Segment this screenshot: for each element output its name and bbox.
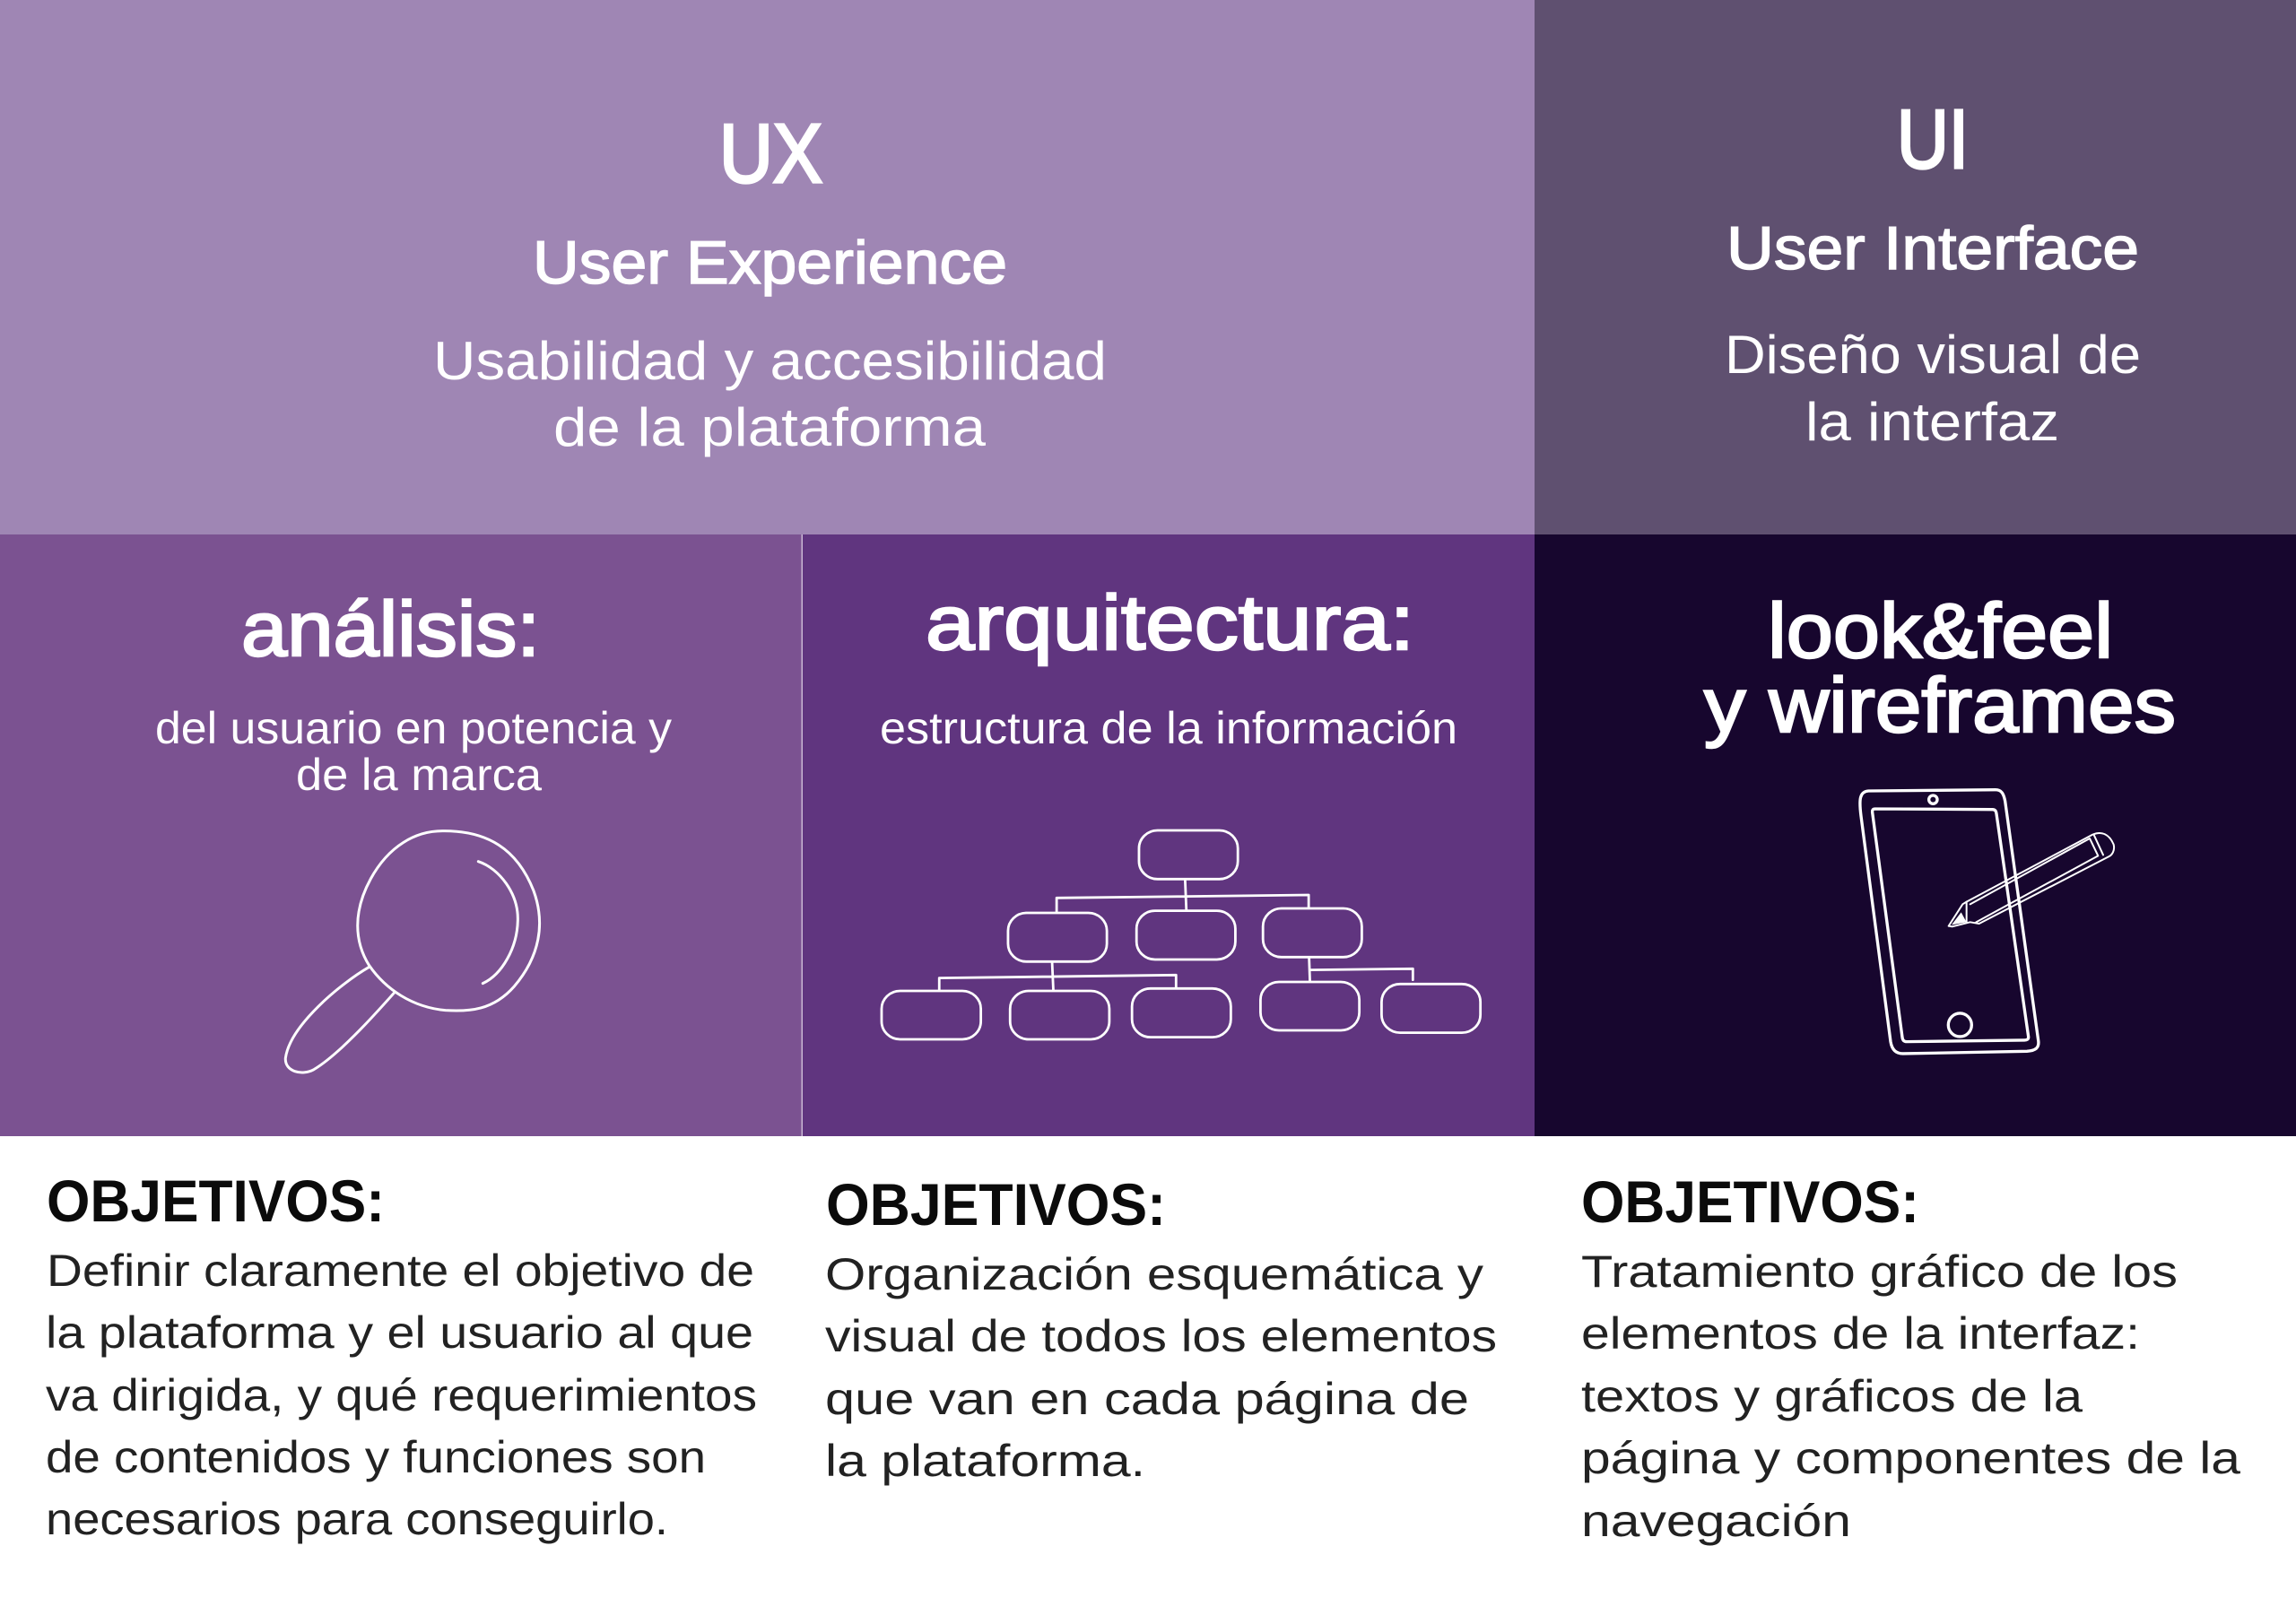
heading: OBJETIVOS:	[826, 1171, 1166, 1238]
heading: OBJETIVOS:	[1581, 1168, 1919, 1235]
UI description: Diseño visual de	[1725, 325, 2141, 385]
body text: Definir claramente el objetivo de	[47, 1246, 754, 1296]
body text: página y componentes de la	[1581, 1433, 2240, 1483]
UI subtitle: User Interface	[1726, 214, 2139, 282]
análisis heading: análisis:	[241, 586, 540, 673]
body text: visual de todos los elementos	[825, 1311, 1497, 1361]
icon: tablet and pencil	[1860, 790, 2114, 1054]
icon: magnifying glass	[285, 831, 540, 1073]
body text: la plataforma.	[825, 1436, 1145, 1486]
body text: elementos de la interfaz:	[1581, 1308, 2140, 1359]
vertical divider	[802, 534, 803, 1136]
column: análisis objectives	[46, 1168, 757, 1544]
body text: navegación	[1581, 1496, 1851, 1546]
body text: va dirigida, y qué requerimientos	[46, 1370, 757, 1420]
UX subtitle: User Experience	[533, 229, 1007, 297]
body text: que van en cada página de	[825, 1374, 1469, 1424]
look&feel heading	[1704, 588, 2176, 749]
body text	[825, 1249, 1497, 1486]
panel: look&feel	[1535, 534, 2296, 1136]
heading: OBJETIVOS:	[47, 1168, 385, 1234]
UI description: la interfaz	[1805, 392, 2059, 452]
body text	[1581, 1246, 2240, 1546]
panel: UX header	[0, 0, 1535, 534]
body text: Organización esquemática y	[825, 1249, 1483, 1299]
column: arquitectura objectives	[825, 1171, 1497, 1486]
análisis description	[155, 703, 672, 800]
análisis description: de la marca	[296, 750, 542, 800]
body text: necesarios para conseguirlo.	[46, 1494, 668, 1544]
panel: UI header	[1535, 0, 2296, 534]
UI description	[1725, 325, 2141, 452]
pencil tip	[1952, 912, 1967, 925]
arquitectura heading: arquitectura:	[926, 580, 1414, 666]
UX description	[433, 331, 1107, 457]
body text: de contenidos y funciones son	[46, 1432, 706, 1482]
body text: la plataforma y el usuario al que	[46, 1307, 753, 1358]
icon: site map	[882, 830, 1481, 1039]
body text	[46, 1246, 757, 1544]
column: look&feel objectives	[1581, 1168, 2240, 1546]
panel: arquitectura	[803, 534, 1535, 1136]
look&feel heading: look&feel	[1768, 588, 2113, 674]
UX title: UX	[719, 107, 822, 200]
look&feel heading: y wireframes	[1704, 663, 2176, 749]
UI title: UI	[1897, 92, 1969, 186]
body text: textos y gráficos de la	[1581, 1371, 2083, 1421]
UX description: de la plataforma	[553, 397, 987, 457]
UX description: Usabilidad y accesibilidad	[433, 331, 1107, 391]
panel: análisis	[0, 534, 802, 1136]
análisis description: del usuario en potencia y	[155, 703, 672, 753]
arquitectura description: estructura de la información	[880, 703, 1457, 753]
body text: Tratamiento gráfico de los	[1581, 1246, 2178, 1297]
